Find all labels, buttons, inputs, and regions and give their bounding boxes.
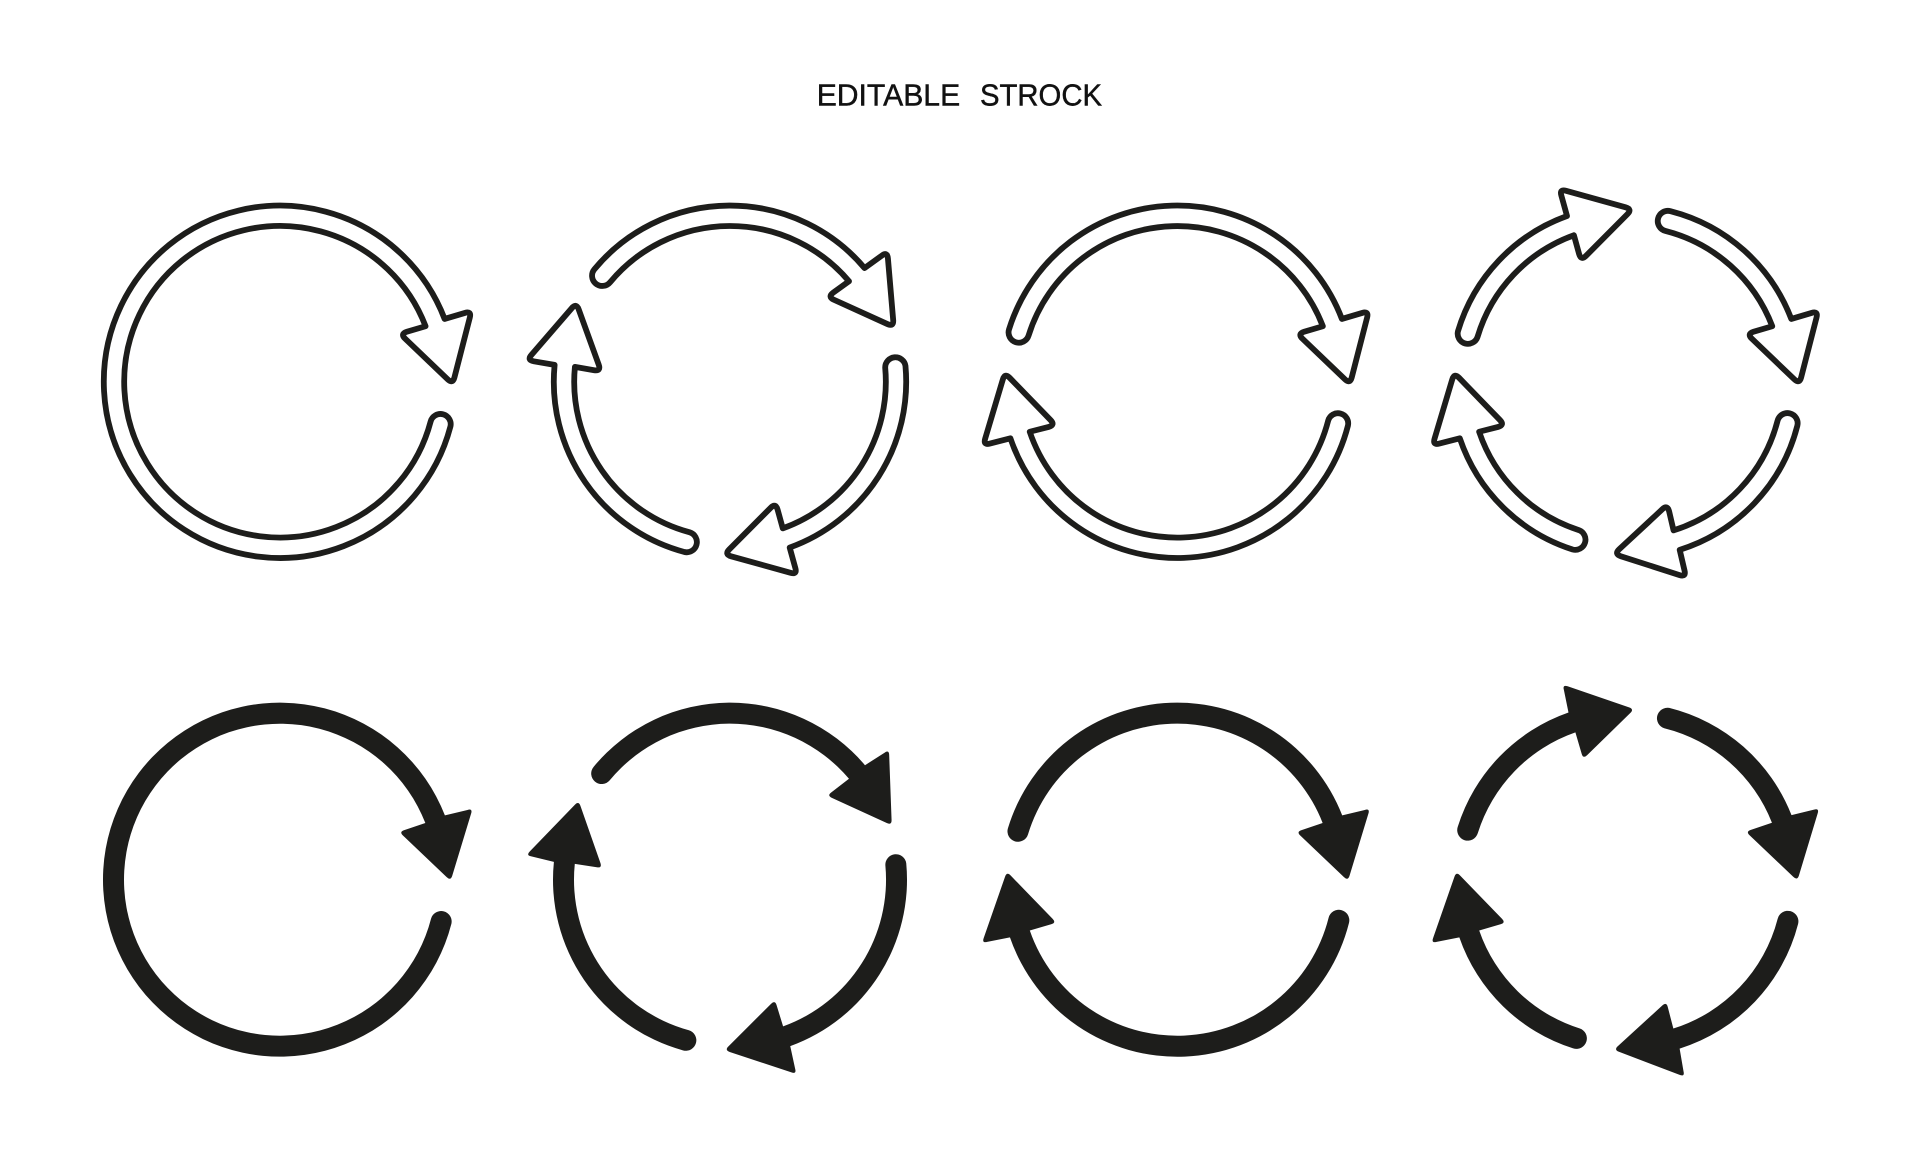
- arrow: single long outline arc: [53, 145, 531, 609]
- arrow: bottom outline: [967, 276, 1375, 613]
- icon: outline two circular arrows: [967, 145, 1387, 613]
- arrow: lower right outline: [684, 354, 959, 592]
- arrow: top outline: [983, 145, 1387, 489]
- arrow: top solid: [981, 641, 1389, 988]
- icon: solid single circular arrow: [51, 641, 534, 1109]
- arrow: right solid: [1654, 670, 1838, 905]
- icon: outline four circular arrows: [1416, 171, 1837, 592]
- icon: solid four circular arrows: [1415, 668, 1838, 1092]
- arrow: single long solid arc: [51, 641, 534, 1109]
- arrow: top outline: [1424, 171, 1654, 347]
- icon: solid three circular arrows: [510, 613, 961, 1092]
- arrow: left outline: [1416, 353, 1588, 582]
- title: STROCK: [980, 78, 1102, 112]
- title: EDITABLE: [817, 78, 960, 112]
- arrow: bottom solid: [1592, 908, 1832, 1092]
- arrow: bottom solid: [965, 773, 1377, 1113]
- arrow: left outline: [513, 302, 718, 553]
- arrow: top outline: [586, 117, 923, 454]
- icon: solid two circular arrows: [965, 641, 1389, 1113]
- arrow: top solid: [1423, 668, 1655, 844]
- arrow: bottom outline: [1592, 410, 1831, 592]
- arrow: lower right solid: [684, 851, 961, 1092]
- icon: outline single circular arrow: [53, 145, 531, 609]
- icon: outline three circular arrows: [513, 117, 959, 592]
- arrow: right outline: [1655, 174, 1837, 408]
- arrow: top solid: [585, 613, 925, 952]
- arrow: left solid: [510, 799, 719, 1052]
- arrow: left solid: [1415, 851, 1590, 1082]
